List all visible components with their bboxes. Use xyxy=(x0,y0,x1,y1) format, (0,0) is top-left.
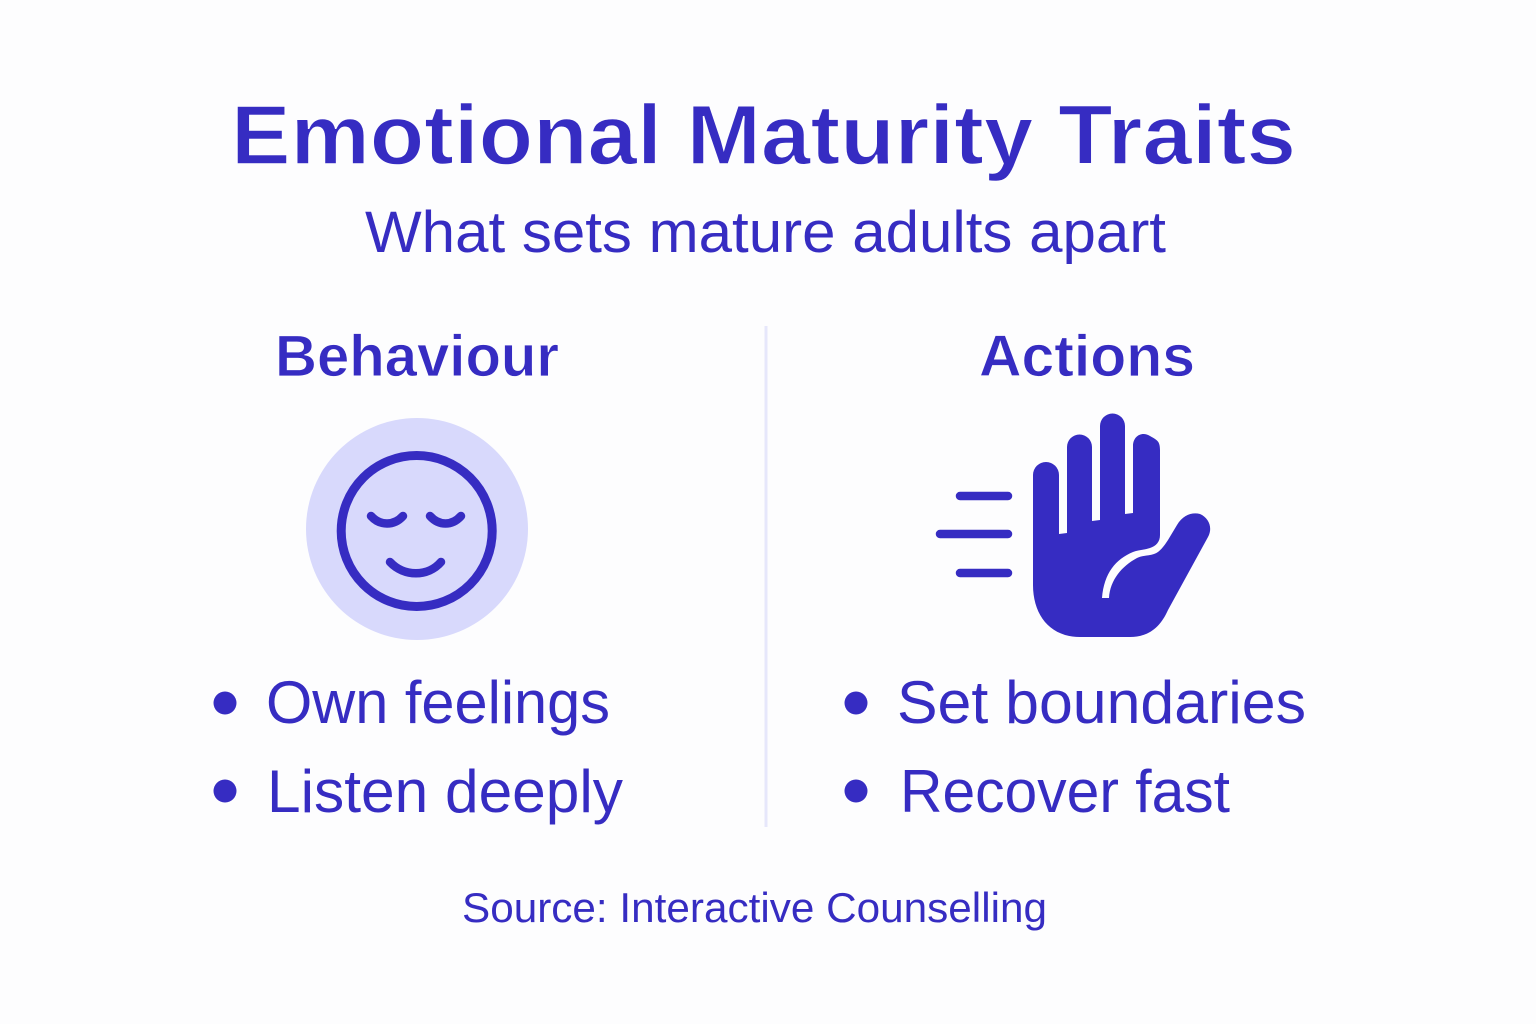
icon: raised hand with motion lines xyxy=(940,413,1210,637)
list: action traits: Set boundaries xyxy=(897,669,1306,736)
heading: actions: Actions xyxy=(979,324,1195,389)
subtitle: What sets mature adults apart xyxy=(365,200,1166,265)
list: behaviour traits xyxy=(214,669,623,825)
icon: calm face xyxy=(306,418,528,640)
panel: behaviour xyxy=(214,324,623,825)
list: action traits xyxy=(844,669,1306,825)
heading: behaviour: Behaviour xyxy=(275,324,559,389)
list: action traits: Recover fast xyxy=(900,758,1230,825)
list: behaviour traits: Own feelings xyxy=(266,669,610,736)
title: Emotional Maturity Traits xyxy=(231,88,1296,182)
source note: Source: Interactive Counselling xyxy=(462,884,1047,931)
list: behaviour traits: Listen deeply xyxy=(267,758,623,825)
panel: actions xyxy=(844,324,1306,825)
